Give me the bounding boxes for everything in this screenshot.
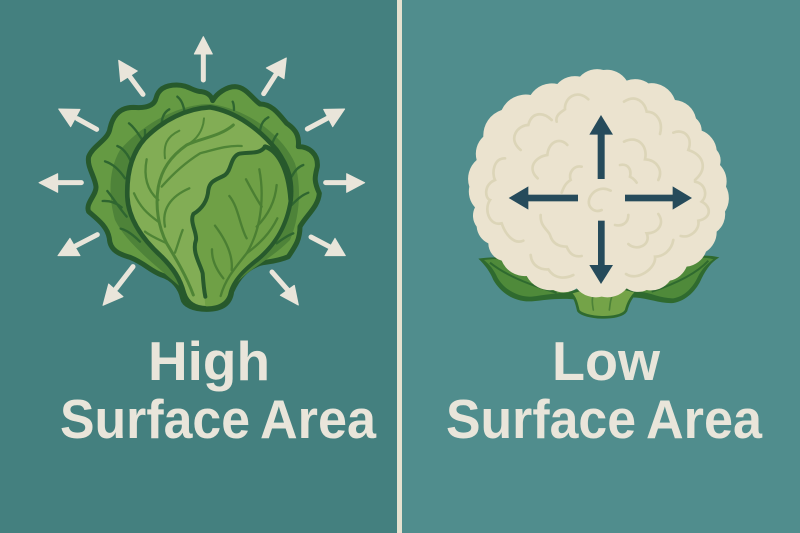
- icon: lettuce: [88, 85, 319, 309]
- arrow: down: [589, 221, 613, 284]
- arrow: right: [625, 186, 692, 210]
- front leaf: [192, 147, 289, 306]
- stem: [570, 283, 637, 317]
- leaves: [478, 256, 719, 303]
- panel: low surface area background: [402, 0, 800, 533]
- arrow: top left: [119, 60, 143, 94]
- arrow: bottom left: [103, 267, 133, 305]
- heading: low surface area: Area: [646, 388, 762, 450]
- outer leaves: [88, 85, 319, 309]
- arrow: upper right: [307, 109, 345, 129]
- leaf shadow: [110, 104, 299, 287]
- icon: cauliflower: [468, 69, 729, 317]
- front leaf veins: [212, 169, 277, 296]
- inner leaf veins: [134, 118, 242, 295]
- arrow: upper left: [59, 109, 97, 129]
- curd: [468, 69, 729, 297]
- curd texture: [486, 95, 709, 278]
- stem veins: [592, 297, 612, 310]
- heading: low surface area: Surface: [446, 388, 636, 450]
- heading: low surface area: [446, 330, 762, 450]
- divider: [397, 0, 402, 533]
- outer leaf veins: [103, 97, 308, 243]
- heading: high surface area: Area: [260, 388, 376, 450]
- arrow: top: [194, 37, 212, 80]
- arrow: up: [589, 115, 613, 179]
- arrow: bottom right: [272, 272, 298, 305]
- heading: high surface area: High: [148, 330, 270, 392]
- arrow: top right: [264, 58, 286, 94]
- arrow: left: [509, 186, 578, 210]
- panel: high surface area background: [0, 0, 397, 533]
- heading: high surface area: Surface: [60, 388, 250, 450]
- arrow: right: [326, 174, 365, 192]
- arrow: lower left: [58, 235, 97, 256]
- arrow: lower right: [311, 237, 345, 256]
- arrow: left: [39, 174, 81, 192]
- heading: low surface area: Low: [552, 330, 660, 392]
- arrows: radiating outward from lettuce: [39, 37, 365, 305]
- inner head: [127, 107, 291, 308]
- heading: high surface area: [60, 330, 376, 450]
